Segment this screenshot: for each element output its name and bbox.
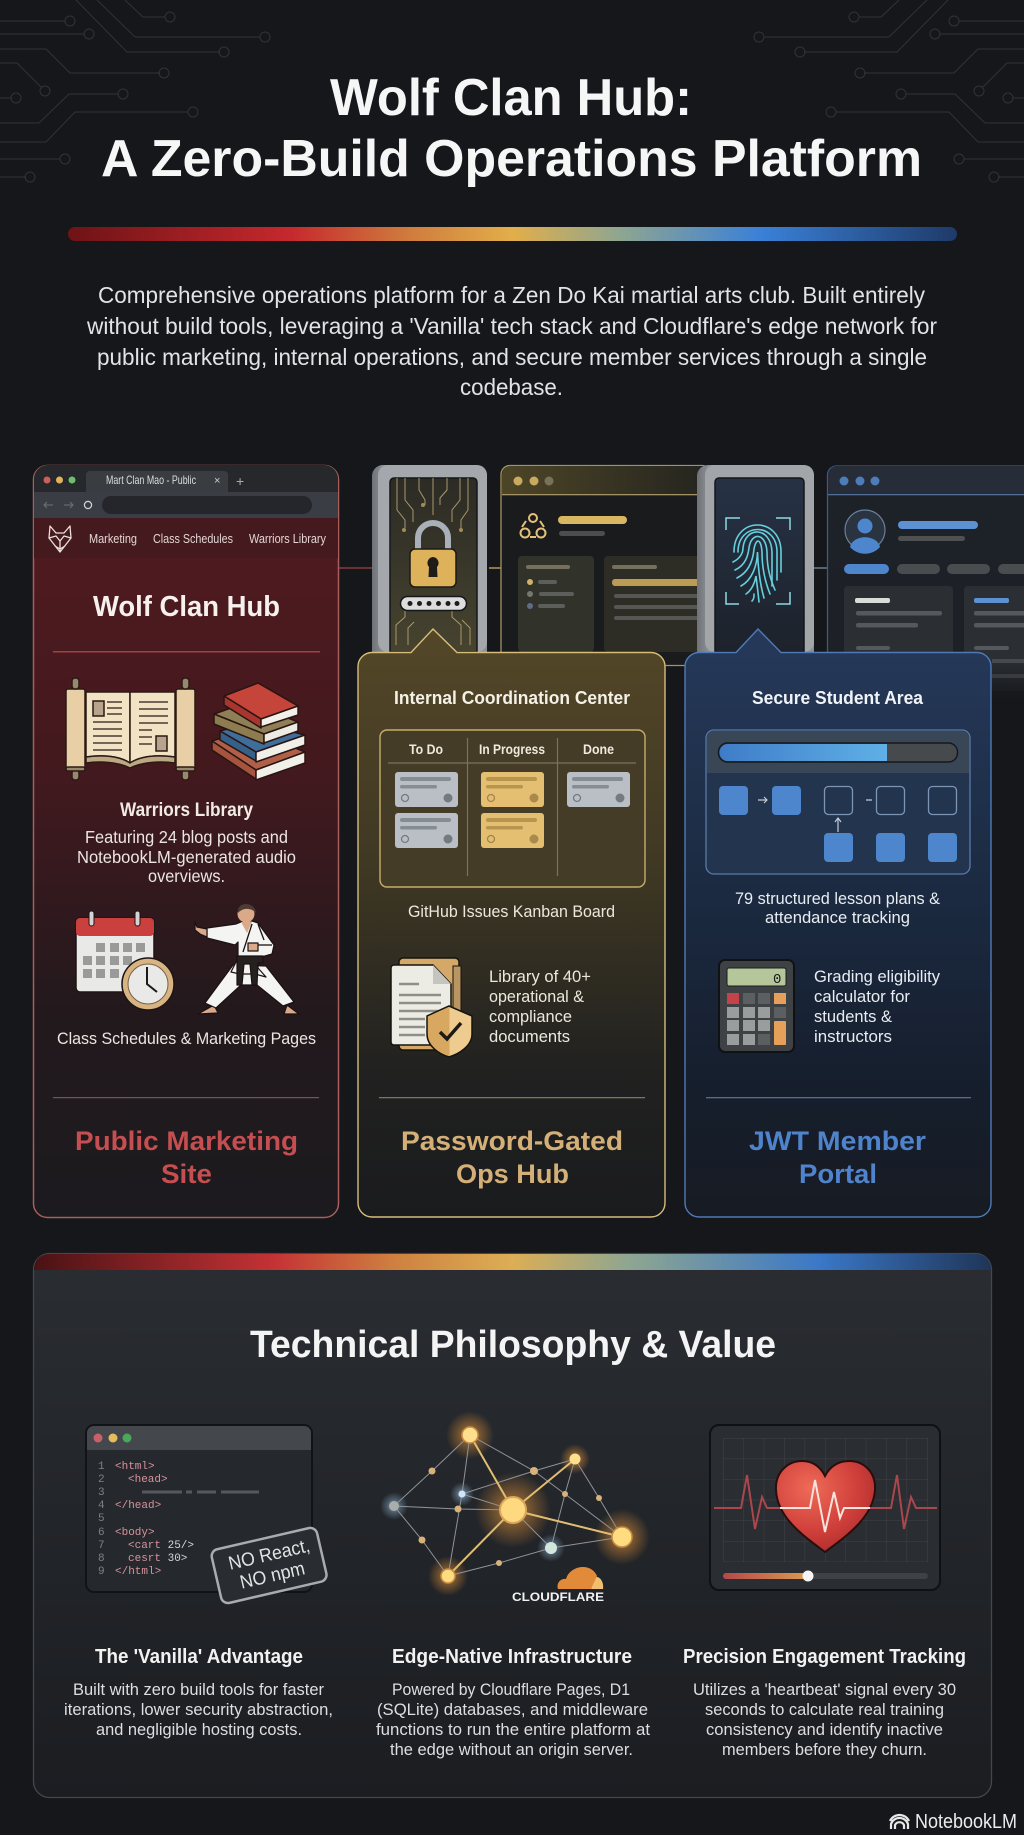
section heading: Technical Philosophy & Value <box>250 1324 776 1366</box>
avatar <box>845 510 885 554</box>
icon: code window: 5 <box>98 1513 105 1525</box>
column: precision engagement tracking <box>683 1646 966 1759</box>
column heading: Edge-Native Infrastructure <box>392 1646 632 1668</box>
column description: seconds to calculate real training <box>705 1701 944 1719</box>
calculator description <box>814 967 940 1046</box>
icon: code window: 9 <box>98 1566 105 1578</box>
column: edge-native infrastructure <box>376 1646 650 1759</box>
column description <box>64 1681 333 1739</box>
column description: Built with zero build tools for faster <box>73 1681 325 1699</box>
icon: code window: <body> <box>115 1527 155 1539</box>
panel: technical philosophy <box>34 1254 992 1798</box>
icon: code window: <head> <box>128 1474 168 1486</box>
network glows <box>380 1411 650 1596</box>
documents description: operational & <box>489 987 585 1006</box>
column description <box>376 1681 650 1759</box>
icon: code window: cesrt 30> <box>128 1553 187 1565</box>
column description: functions to run the entire platform at <box>376 1721 650 1739</box>
browser chrome: + <box>236 473 244 489</box>
intro paragraph: codebase. <box>460 374 563 400</box>
icon: code window: </head> <box>115 1500 161 1512</box>
kanban caption: GitHub Issues Kanban Board <box>408 902 615 921</box>
panel label: Public Marketing <box>75 1126 298 1156</box>
stamp: no react no npm: NO React, <box>227 1536 312 1575</box>
connector lines between columns <box>339 567 827 569</box>
panel label <box>749 1126 927 1189</box>
kanban board: Done <box>583 742 614 757</box>
panel label <box>75 1126 298 1189</box>
library description: NotebookLM-generated audio <box>77 847 296 867</box>
panel label: JWT Member <box>749 1126 927 1156</box>
phone: fingerprint scanner <box>697 465 814 652</box>
password field <box>400 596 466 610</box>
network edges <box>394 1435 622 1576</box>
column description: Powered by Cloudflare Pages, D1 <box>392 1681 630 1699</box>
column description: and negligible hosting costs. <box>96 1721 302 1739</box>
circuit pattern: top left <box>0 0 270 182</box>
panel body with notch <box>685 629 991 1217</box>
section title: Internal Coordination Center <box>394 687 630 708</box>
kanban board: To Do <box>409 742 443 757</box>
panel: password-gated ops hub <box>358 629 665 1217</box>
cloudflare wordmark: CLOUDFLARE <box>512 1590 604 1604</box>
top gradient band <box>34 1254 991 1270</box>
icon: wolf head <box>49 526 71 552</box>
documents description: documents <box>489 1027 570 1046</box>
kanban board: In Progress <box>479 742 545 757</box>
circuit traces <box>396 478 470 645</box>
title gradient divider <box>68 227 957 241</box>
circuit pattern: top right <box>754 0 1024 182</box>
icon: heart monitor <box>710 1425 940 1590</box>
intro paragraph: public marketing, internal operations, and secure member services through a single <box>97 344 927 370</box>
scanner corners <box>726 518 790 604</box>
column description: consistency and identify inactive <box>706 1721 943 1739</box>
title: A Zero-Build Operations Platform <box>101 130 922 188</box>
nav links: Warriors Library <box>249 532 327 546</box>
icon: open scroll <box>66 678 195 780</box>
library description: Featuring 24 blog posts and <box>85 827 288 847</box>
site title: Wolf Clan Hub <box>93 591 280 623</box>
documents description: compliance <box>489 1007 572 1026</box>
section title: Secure Student Area <box>752 687 924 708</box>
icon: code window: 8 <box>98 1553 105 1565</box>
documents description <box>489 967 591 1046</box>
nav links <box>89 532 327 546</box>
icon: code window: <html> <box>115 1461 155 1473</box>
intro paragraph <box>86 282 937 400</box>
lesson plans caption <box>735 889 941 927</box>
panel label <box>401 1126 623 1189</box>
panel body with notch <box>358 629 665 1217</box>
panel: JWT member portal <box>685 629 991 1217</box>
icon: documents and shield <box>391 958 472 1057</box>
network diagram <box>380 1411 650 1604</box>
library description <box>77 827 296 886</box>
column: vanilla advantage <box>64 1646 333 1739</box>
icon: karate figure <box>195 904 299 1014</box>
kanban board <box>380 730 645 887</box>
column heading: Precision Engagement Tracking <box>683 1646 966 1668</box>
column description: Utilizes a 'heartbeat' signal every 30 <box>693 1681 956 1699</box>
lesson progress card <box>706 730 970 874</box>
browser mockup: member dashboard <box>828 466 1024 700</box>
library heading: Warriors Library <box>120 800 253 821</box>
title <box>101 69 922 188</box>
stamp: no react no npm <box>210 1527 328 1604</box>
library description: overviews. <box>148 866 225 886</box>
panel label: Ops Hub <box>456 1159 569 1189</box>
panel body <box>34 466 338 1218</box>
title: Wolf Clan Hub: <box>330 69 692 127</box>
notebooklm watermark <box>890 1810 1017 1833</box>
nav links: Marketing <box>89 532 137 546</box>
lesson plans caption: 79 structured lesson plans & <box>735 889 941 908</box>
icon: calculator <box>719 960 794 1052</box>
icon: code window: 4 <box>98 1500 105 1512</box>
icon: code window: 6 <box>98 1527 105 1539</box>
browser mockup: ops hub dashboard <box>501 466 711 666</box>
column description: the edge without an origin server. <box>390 1741 633 1759</box>
calculator description: students & <box>814 1007 893 1026</box>
column description: iterations, lower security abstraction, <box>64 1701 333 1719</box>
icon: notebooklm logo <box>890 1815 909 1829</box>
nodes <box>389 1427 632 1583</box>
panel label: Portal <box>799 1159 877 1189</box>
icon: code window: 1 <box>98 1461 105 1473</box>
lesson plans caption: attendance tracking <box>765 908 910 927</box>
documents description: Library of 40+ <box>489 967 591 986</box>
panel: public marketing site <box>34 465 338 1218</box>
browser chrome: × <box>214 475 220 487</box>
column heading: The 'Vanilla' Advantage <box>95 1646 303 1668</box>
icon: fingerprint <box>733 525 781 602</box>
browser chrome: Mart Clan Mao - Public <box>106 473 196 487</box>
icon: code window: <cart 25/> <box>128 1540 194 1552</box>
icon: book stack <box>212 683 305 780</box>
icon: code window: </html> <box>115 1566 161 1578</box>
icon: code window: 2 <box>98 1474 105 1486</box>
intro paragraph: without build tools, leveraging a 'Vanilla' tech stack and Cloudflare's edge network for <box>86 313 937 339</box>
icon: code window: 3 <box>98 1487 105 1499</box>
panel label: Site <box>161 1159 212 1189</box>
schedules caption: Class Schedules & Marketing Pages <box>57 1029 316 1048</box>
column description: members before they churn. <box>722 1741 927 1759</box>
nav links: Class Schedules <box>153 532 233 546</box>
calculator description: calculator for <box>814 987 910 1006</box>
icon: calendar and clock <box>76 911 174 1010</box>
column description: (SQLite) databases, and middleware <box>377 1701 648 1719</box>
browser chrome <box>34 465 338 558</box>
stamp: no react no npm: NO npm <box>238 1558 307 1594</box>
icon: cloudflare cloud <box>558 1567 603 1589</box>
panel body <box>34 1254 992 1798</box>
calculator description: instructors <box>814 1027 892 1046</box>
phone: password lock <box>372 465 487 652</box>
icon: padlock <box>410 523 456 587</box>
intro paragraph: Comprehensive operations platform for a Zen Do Kai martial arts club. Built entirely <box>98 282 925 308</box>
icon: code window: 7 <box>98 1540 105 1552</box>
icon: calculator: 0 <box>773 972 781 988</box>
panel label: Password-Gated <box>401 1126 623 1156</box>
icon: code window <box>86 1425 312 1592</box>
column description <box>693 1681 956 1759</box>
calculator description: Grading eligibility <box>814 967 940 986</box>
